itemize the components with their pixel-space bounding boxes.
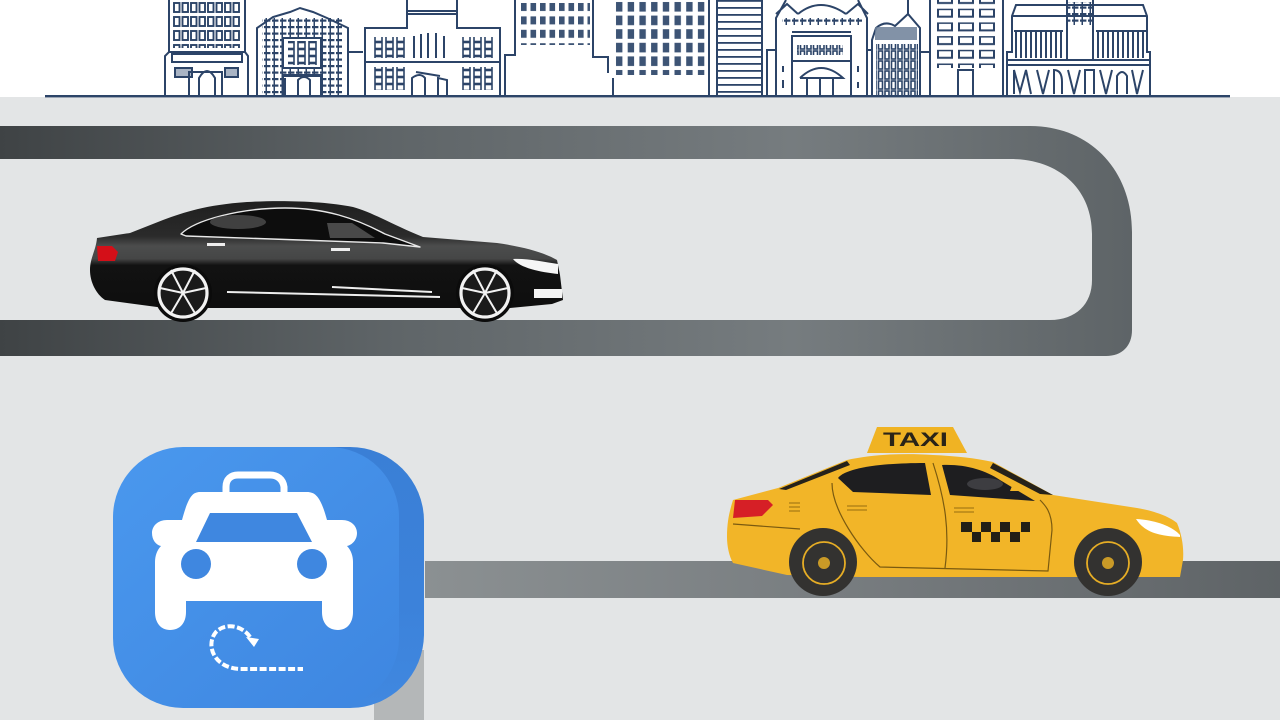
building 6: [717, 0, 762, 96]
building 10: [1007, 0, 1150, 96]
road: taxi road: [425, 561, 1280, 598]
side windows with chrome trim: [181, 208, 420, 247]
building 9: [930, 0, 1003, 96]
building 2: [257, 8, 363, 96]
building 4: [505, 0, 608, 96]
icon: dashed route arrow: [211, 626, 303, 669]
window reflection: [967, 478, 1003, 490]
tile side: [150, 447, 424, 708]
side trim: [227, 287, 440, 297]
car silhouette: [152, 492, 357, 630]
building 1: [165, 0, 248, 96]
road: upper looping road: [0, 126, 1132, 356]
door lines: [733, 463, 1052, 571]
door handles: [207, 243, 225, 246]
tile face: [113, 447, 399, 708]
building 3: [365, 0, 500, 96]
rear wheel: [154, 264, 212, 322]
checker stripe: [961, 522, 1030, 542]
headlights: [181, 549, 211, 579]
sign label: TAXI: [883, 430, 948, 451]
window reflections: [210, 215, 266, 229]
skyline: city buildings: [165, 0, 1150, 96]
side mirror: [1010, 486, 1024, 491]
icon: white taxi front: [152, 475, 357, 630]
building 8: [872, 0, 930, 96]
app icon: blue taxi tile: [113, 447, 424, 708]
building 7: [767, 0, 872, 96]
roof sign: [867, 427, 967, 453]
building 5: [613, 0, 709, 96]
front wheel: [1074, 528, 1142, 596]
rear side window: [838, 463, 931, 495]
door handles: [789, 503, 974, 512]
rear wheel: [789, 528, 857, 596]
black sedan: [90, 201, 563, 322]
headlight: [1136, 519, 1180, 537]
front side window: [942, 465, 1035, 501]
tail light: [97, 246, 118, 261]
headlight: [513, 259, 558, 274]
yellow taxi: [727, 427, 1183, 596]
skyline ground line: [45, 95, 1230, 97]
car body: [727, 454, 1183, 577]
dark roof edge: [779, 461, 1053, 495]
car body: [90, 201, 563, 308]
front wheel: [456, 264, 514, 322]
windshield: [196, 513, 312, 542]
tail light: [733, 500, 773, 518]
roof sign outline: [226, 475, 284, 494]
road: stub beneath app icon: [374, 650, 424, 720]
